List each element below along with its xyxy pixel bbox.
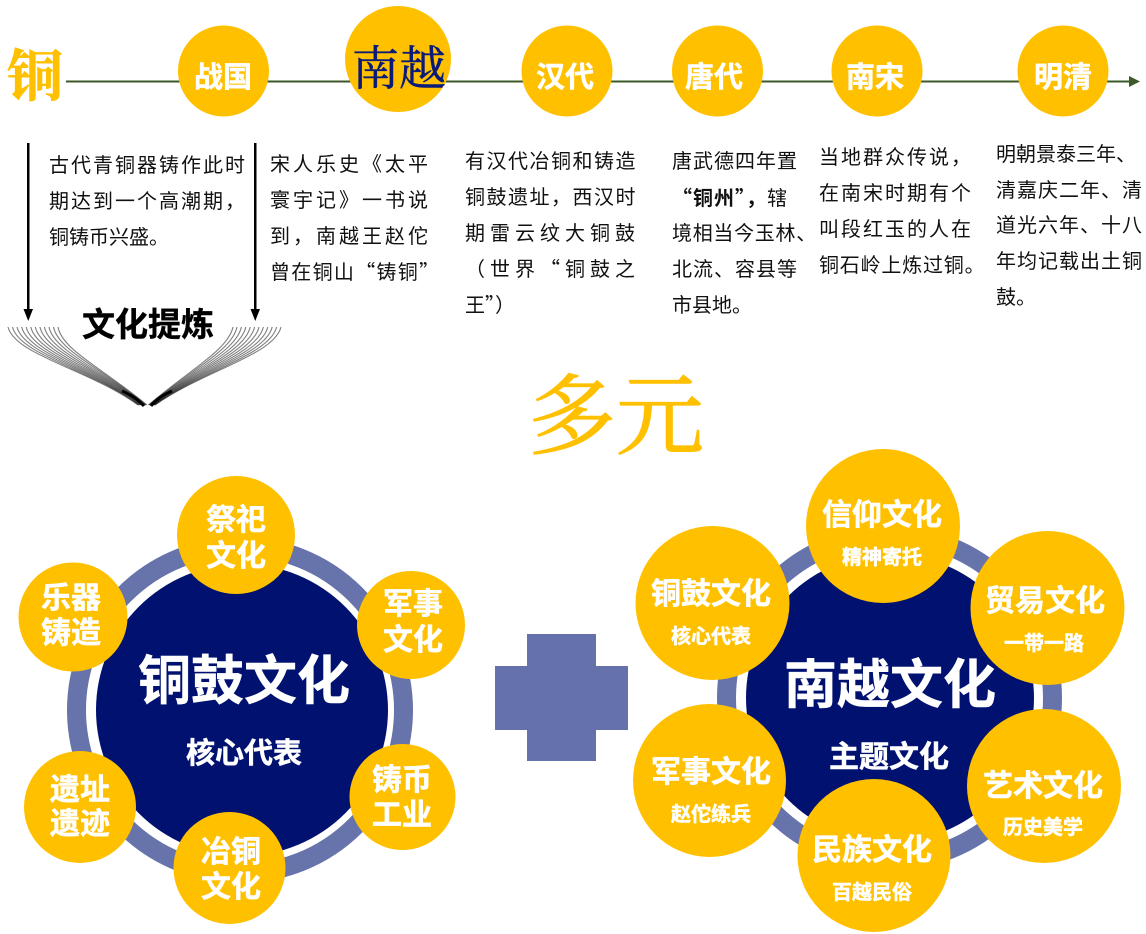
text: Ming Qing (996, 138, 1143, 310)
heading: cultural refinement: 文化提炼 (82, 298, 214, 346)
text: Tang: 境相当今玉林、 (672, 217, 817, 246)
node: art (967, 709, 1121, 863)
node: belief (806, 449, 960, 603)
text: Ming Qing: 清嘉庆二年、清 (996, 174, 1143, 203)
text: Tang (672, 145, 817, 318)
node: military: 军事文化 (651, 747, 771, 791)
title: copper: 铜 (7, 33, 63, 113)
era: Southern Song: 南宋 (846, 54, 904, 96)
text: Warring States: 铜铸币兴盛。 (49, 221, 169, 250)
icon: plus (495, 634, 628, 761)
ring and hub (76, 546, 404, 874)
era: Southern Song (832, 26, 922, 116)
node: ethnic: 百越民俗 (832, 876, 912, 905)
node: military: 赵佗练兵 (671, 798, 751, 827)
node: belief: 信仰文化 (822, 490, 942, 534)
node: coin industry (350, 744, 456, 850)
text: Ming Qing: 鼓。 (996, 281, 1036, 310)
text: Warring States (49, 149, 247, 250)
node: instruments (18, 562, 128, 672)
node: ritual: 文化 (206, 531, 266, 575)
node: ritual (177, 476, 295, 594)
era: Ming Qing: 明清 (1034, 54, 1092, 96)
node: instruments: 铸造 (41, 608, 101, 652)
text: Southern Song: 叫段红玉的人在 (819, 213, 973, 242)
node: military: 军事 (383, 579, 443, 623)
node: trade (970, 531, 1124, 685)
text: Han: 期雷云纹大铜鼓 (465, 217, 640, 246)
era: Nanyue (345, 6, 451, 112)
node: military (633, 704, 786, 857)
text: Tang: 北流、容县等 (672, 253, 798, 282)
ring and hub: 南越文化 (784, 643, 996, 719)
node: sites (24, 751, 136, 863)
text: Ming Qing: 明朝景泰三年、 (996, 138, 1136, 167)
node: bronze drum: 铜鼓文化 (651, 569, 771, 613)
text: Southern Song (819, 141, 985, 278)
node: smelting: 冶铜 (201, 827, 261, 871)
node: bronze drum (636, 526, 790, 680)
node: art: 历史美学 (1003, 811, 1083, 840)
text: Han: 王”） (465, 289, 515, 318)
node: belief: 精神寄托 (842, 541, 922, 570)
text: Han: 有汉代冶铜和铸造 (465, 145, 637, 174)
text: Warring States: 古代青铜器铸作此时 (49, 149, 247, 178)
text: Han: （世界“铜鼓之 (465, 253, 640, 282)
text: Southern Song: 铜石岭上炼过铜。 (819, 249, 985, 278)
era: Warring States (178, 26, 269, 116)
text: Nanyue: 宋人乐史《太平 (270, 148, 431, 177)
text: Southern Song: 当地群众传说， (819, 141, 973, 170)
text: Nanyue: 曾在铜山“铸铜” (270, 256, 440, 285)
diagram: bronze drum culture (18, 476, 465, 924)
icon: converging fan of lines (8, 327, 281, 406)
heading: diversity: 多元 (528, 347, 704, 473)
text: Nanyue (270, 148, 440, 285)
text: Han: 铜鼓遗址，西汉时 (465, 181, 637, 210)
node: ritual: 祭祀 (206, 495, 266, 539)
diagram: Nanyue culture (633, 449, 1124, 932)
node: sites: 遗迹 (50, 799, 110, 843)
node: smelting: 文化 (201, 862, 261, 906)
text: Han (465, 145, 640, 318)
text: Nanyue: 到，南越王赵佗 (270, 220, 431, 249)
text: Southern Song: 在南宋时期有个 (819, 177, 973, 206)
text: Nanyue: 寰宇记》一书说 (270, 184, 431, 213)
ring and hub (726, 535, 1052, 861)
era: Ming Qing (1018, 26, 1108, 116)
ring and hub: 主题文化 (829, 732, 949, 776)
era: Han (522, 26, 612, 116)
ring and hub: 核心代表 (186, 730, 302, 772)
node: art: 艺术文化 (983, 761, 1103, 805)
arrow: left down (24, 143, 33, 321)
node: ethnic: 民族文化 (812, 825, 932, 869)
node: trade: 一带一路 (1004, 627, 1084, 656)
text: Tang: 市县地。 (672, 289, 752, 318)
node: trade: 贸易文化 (985, 576, 1105, 620)
era: Nanyue: 南越 (352, 32, 446, 99)
text: Ming Qing: 年均记载出土铜 (996, 245, 1143, 274)
node: bronze drum: 核心代表 (671, 620, 751, 649)
era: Tang: 唐代 (685, 54, 743, 96)
text: Tang: “铜州”，辖 (672, 182, 788, 211)
node: sites: 遗址 (50, 765, 110, 809)
ring and hub: 铜鼓文化 (138, 639, 350, 715)
node: smelting (174, 812, 286, 924)
text: Warring States: 期达到一个高潮期， (49, 185, 247, 214)
node: coin industry: 铸币 (372, 755, 432, 799)
text: Tang: 唐武德四年置 (672, 145, 798, 174)
text: Ming Qing: 道光六年、十八 (996, 209, 1143, 238)
node: coin industry: 工业 (372, 790, 432, 834)
node: military (357, 571, 465, 679)
era: Tang (672, 26, 763, 116)
timeline arrow (66, 76, 1140, 87)
node: ethnic (798, 779, 950, 932)
node: military: 文化 (383, 615, 443, 659)
era: Han: 汉代 (536, 54, 594, 96)
node: instruments: 乐器 (41, 573, 101, 617)
arrow: right down (250, 143, 260, 321)
era: Warring States: 战国 (194, 54, 252, 96)
